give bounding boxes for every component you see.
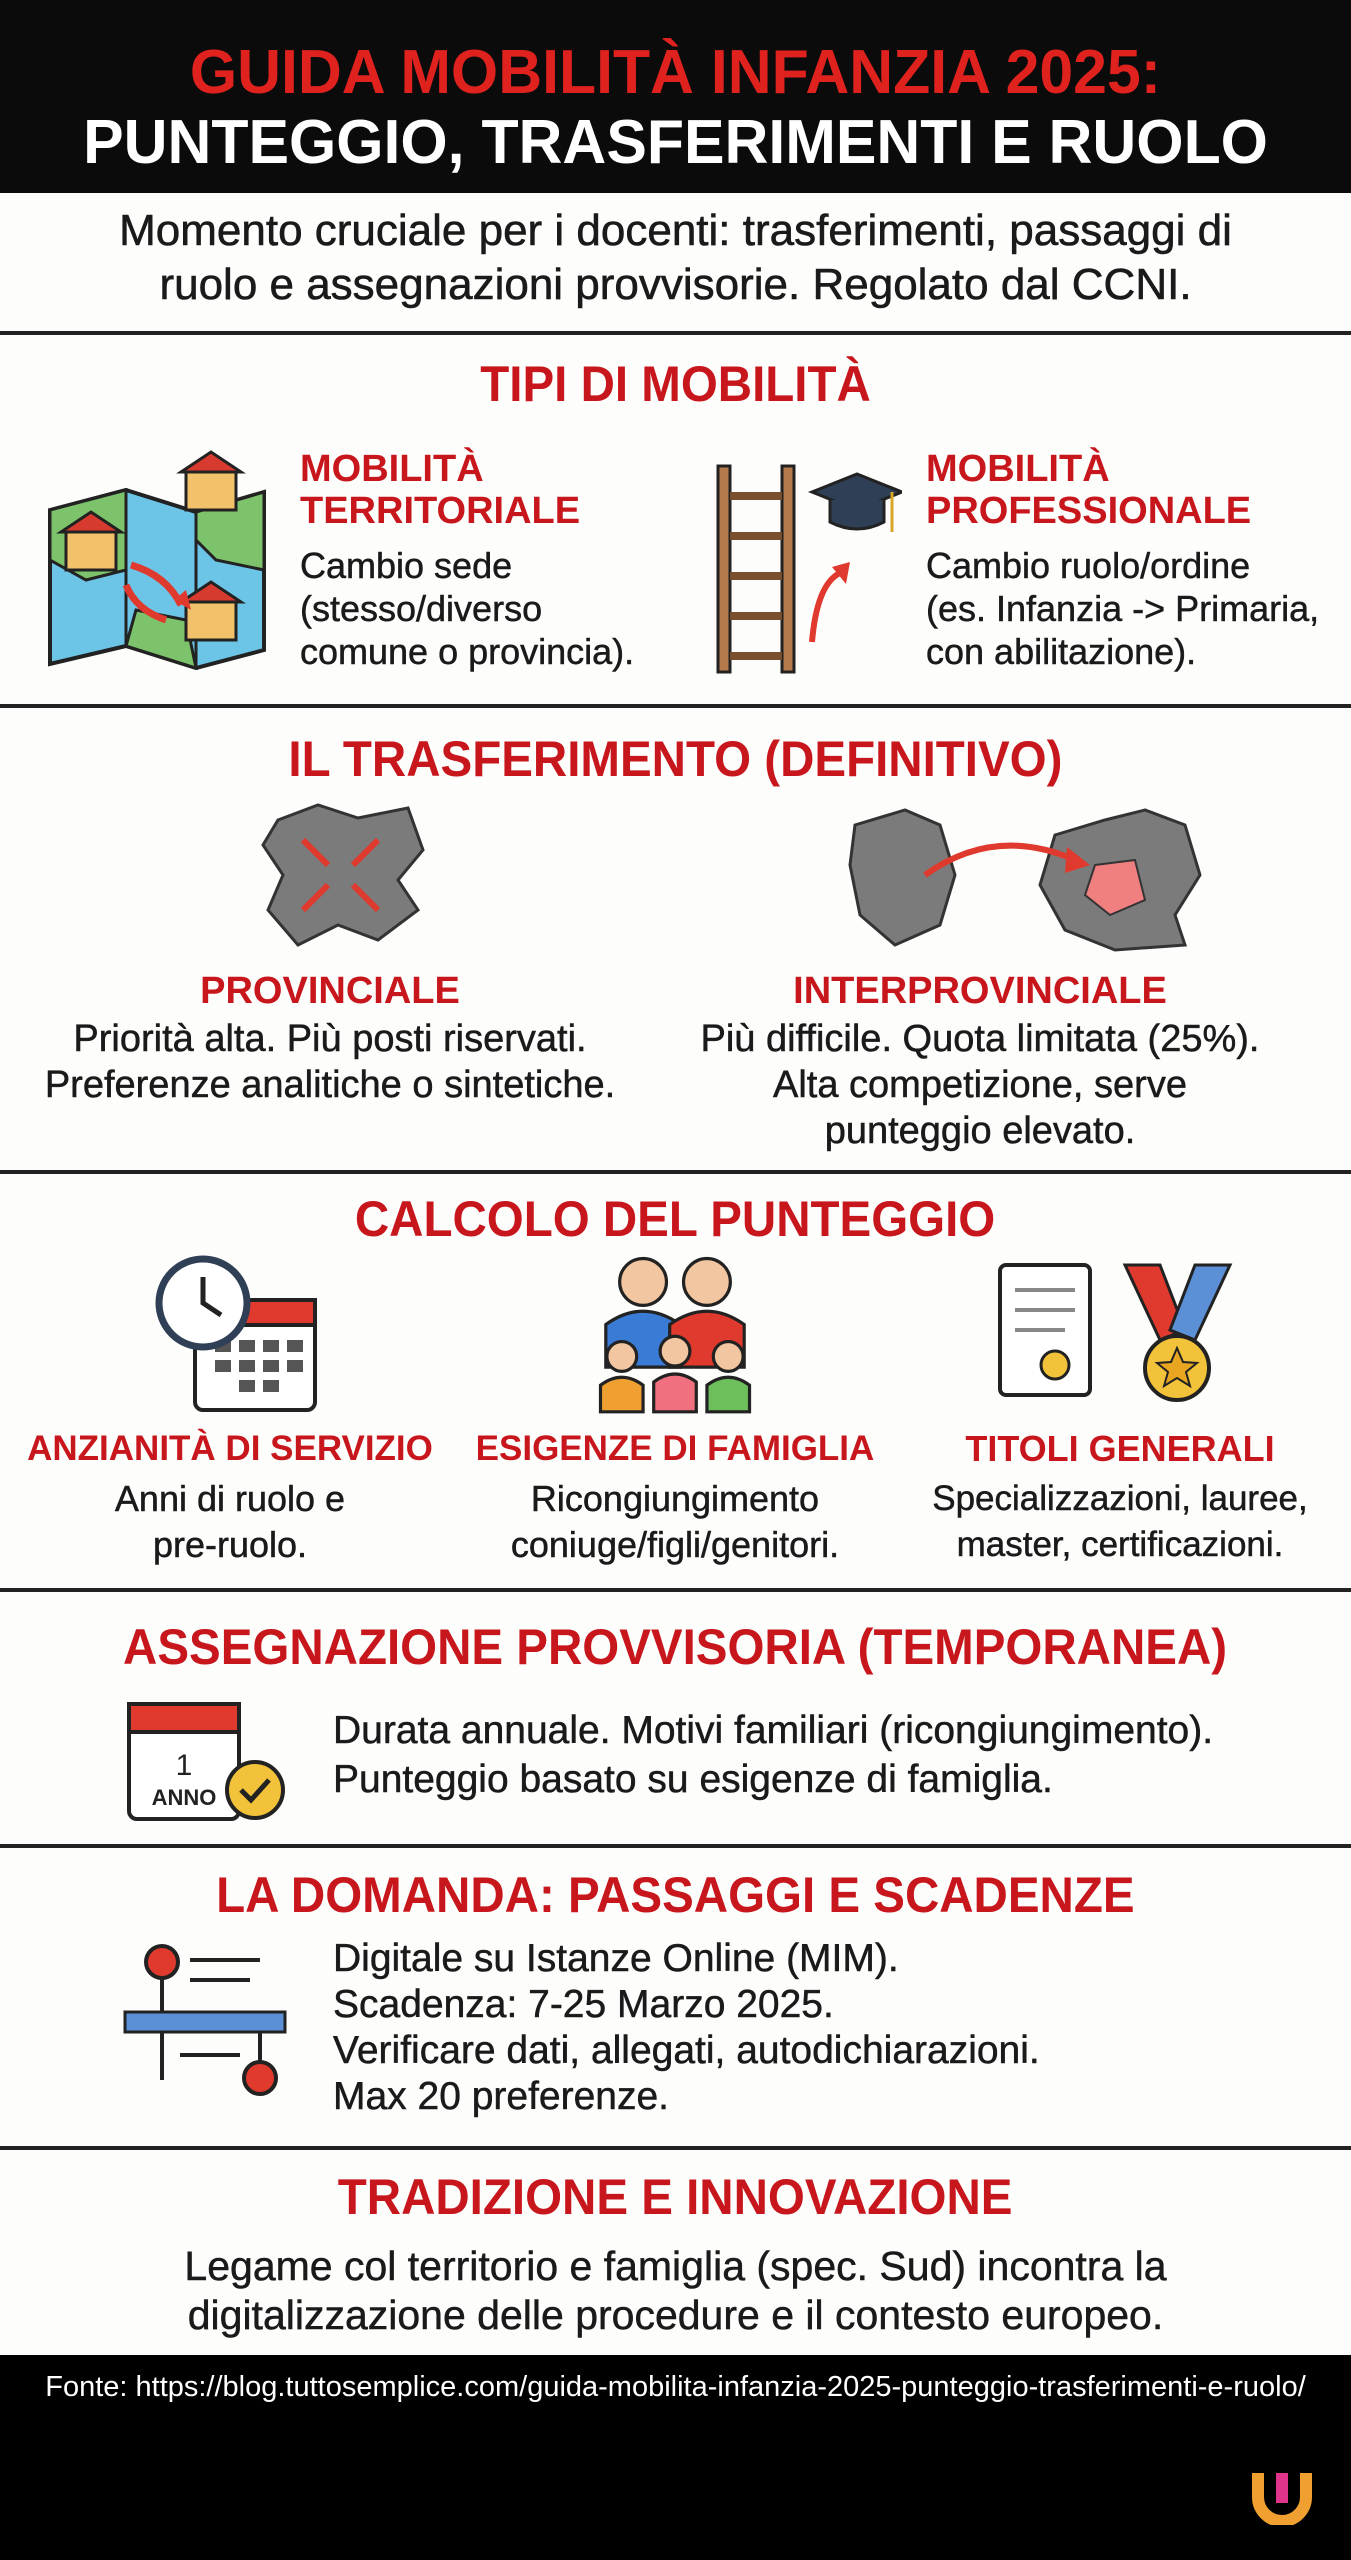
icon: provincial map: [261, 803, 425, 947]
footer: [0, 2355, 1351, 2560]
text: tradizione: Legame col territorio e famiglia (spec. Sud) incontra la: [184, 2243, 1167, 2289]
heading: tipi di mobilità: TIPI DI MOBILITÀ: [480, 356, 871, 412]
text: famiglia: [476, 1429, 874, 1565]
text: anzianità: ANZIANITÀ DI SERVIZIO: [27, 1429, 433, 1468]
icon: timeline: [124, 1944, 286, 2096]
text: assegnazione: [333, 1709, 1213, 1801]
text: domanda: Verificare dati, allegati, autodichiarazioni.: [333, 2029, 1040, 2072]
text: territoriale: MOBILITÀ: [300, 448, 484, 490]
heading: calcolo: CALCOLO DEL PUNTEGGIO: [355, 1191, 996, 1247]
text: professionale: con abilitazione).: [926, 631, 1196, 672]
heading: domanda: LA DOMANDA: PASSAGGI E SCADENZE: [216, 1867, 1135, 1923]
icon: clock calendar: [156, 1256, 317, 1412]
logo: [1252, 2473, 1312, 2525]
text: domanda: Max 20 preferenze.: [333, 2075, 669, 2118]
text: territoriale: Cambio sede: [300, 545, 512, 586]
text: tradizione: [184, 2243, 1167, 2338]
text: domanda: Scadenza: 7-25 Marzo 2025.: [333, 1983, 834, 2026]
text: titoli: master, certificazioni.: [957, 1525, 1283, 1564]
header: [0, 0, 1351, 193]
icon: ladder and cap: [716, 464, 902, 674]
intro text: ruolo e assegnazioni provvisorie. Regolato dal CCNI.: [159, 260, 1192, 309]
text: provinciale: Preferenze analitiche o sintetiche.: [45, 1064, 615, 1106]
text: territoriale: comune o provincia).: [300, 631, 634, 672]
text: anzianità: [27, 1428, 433, 1565]
text: territoriale: [300, 447, 634, 672]
title: PUNTEGGIO, TRASFERIMENTI E RUOLO: [83, 108, 1268, 177]
icon: map: [48, 450, 266, 670]
title: [83, 38, 1268, 177]
text: domanda: [332, 1937, 1040, 2118]
text: provinciale: PROVINCIALE: [200, 970, 460, 1012]
text: famiglia: ESIGENZE DI FAMIGLIA: [476, 1429, 874, 1468]
heading: tradizione: TRADIZIONE E INNOVAZIONE: [338, 2169, 1013, 2225]
title: GUIDA MOBILITÀ INFANZIA 2025:: [190, 38, 1161, 107]
heading: assegnazione: ASSEGNAZIONE PROVVISORIA (TEMPORANEA): [123, 1619, 1228, 1675]
text: professionale: [926, 447, 1319, 672]
text: interprovinciale: [700, 970, 1259, 1152]
text: anzianità: Anni di ruolo e: [115, 1478, 345, 1519]
icon: calendar anno: 1: [176, 1749, 192, 1782]
heading: trasferimento: IL TRASFERIMENTO (DEFINITIVO): [288, 731, 1063, 787]
text: interprovinciale: Alta competizione, serve: [773, 1064, 1187, 1106]
text: professionale: Cambio ruolo/ordine: [926, 545, 1250, 586]
text: tradizione: digitalizzazione delle procedure e il contesto europeo.: [188, 2292, 1163, 2338]
intro text: [119, 206, 1232, 309]
text: famiglia: Ricongiungimento: [531, 1478, 819, 1519]
text: professionale: PROFESSIONALE: [926, 490, 1251, 532]
source text: Fonte: https://blog.tuttosemplice.com/guida-mobilita-infanzia-2025-punteggio-trasferimenti-e-ruolo/: [45, 2371, 1306, 2403]
text: titoli: TITOLI GENERALI: [965, 1428, 1275, 1469]
text: provinciale: [45, 970, 615, 1106]
text: domanda: Digitale su Istanze Online (MIM).: [333, 1937, 899, 1980]
text: interprovinciale: INTERPROVINCIALE: [793, 970, 1167, 1012]
text: territoriale: TERRITORIALE: [300, 490, 580, 532]
text: provinciale: Priorità alta. Più posti riservati.: [73, 1018, 587, 1060]
icon: calendar anno: ANNO: [152, 1785, 216, 1810]
icon: family: [598, 1256, 752, 1414]
text: assegnazione: Punteggio basato su esigenze di famiglia.: [333, 1758, 1053, 1801]
text: interprovinciale: Più difficile. Quota limitata (25%).: [700, 1018, 1259, 1060]
text: titoli: [932, 1428, 1308, 1564]
icon: interprovincial maps: [848, 808, 1202, 952]
text: anzianità: pre-ruolo.: [153, 1524, 307, 1565]
text: interprovinciale: punteggio elevato.: [825, 1110, 1135, 1152]
text: professionale: MOBILITÀ: [926, 448, 1110, 490]
icon: diploma medal: [998, 1263, 1232, 1402]
text: territoriale: (stesso/diverso: [300, 588, 542, 629]
text: assegnazione: Durata annuale. Motivi familiari (ricongiungimento).: [333, 1709, 1213, 1752]
icon: calendar anno: [127, 1702, 285, 1821]
text: titoli: Specializzazioni, lauree,: [932, 1479, 1308, 1518]
intro text: Momento cruciale per i docenti: trasferimenti, passaggi di: [119, 206, 1232, 255]
text: famiglia: coniuge/figli/genitori.: [511, 1524, 839, 1565]
text: professionale: (es. Infanzia -> Primaria,: [926, 588, 1319, 629]
